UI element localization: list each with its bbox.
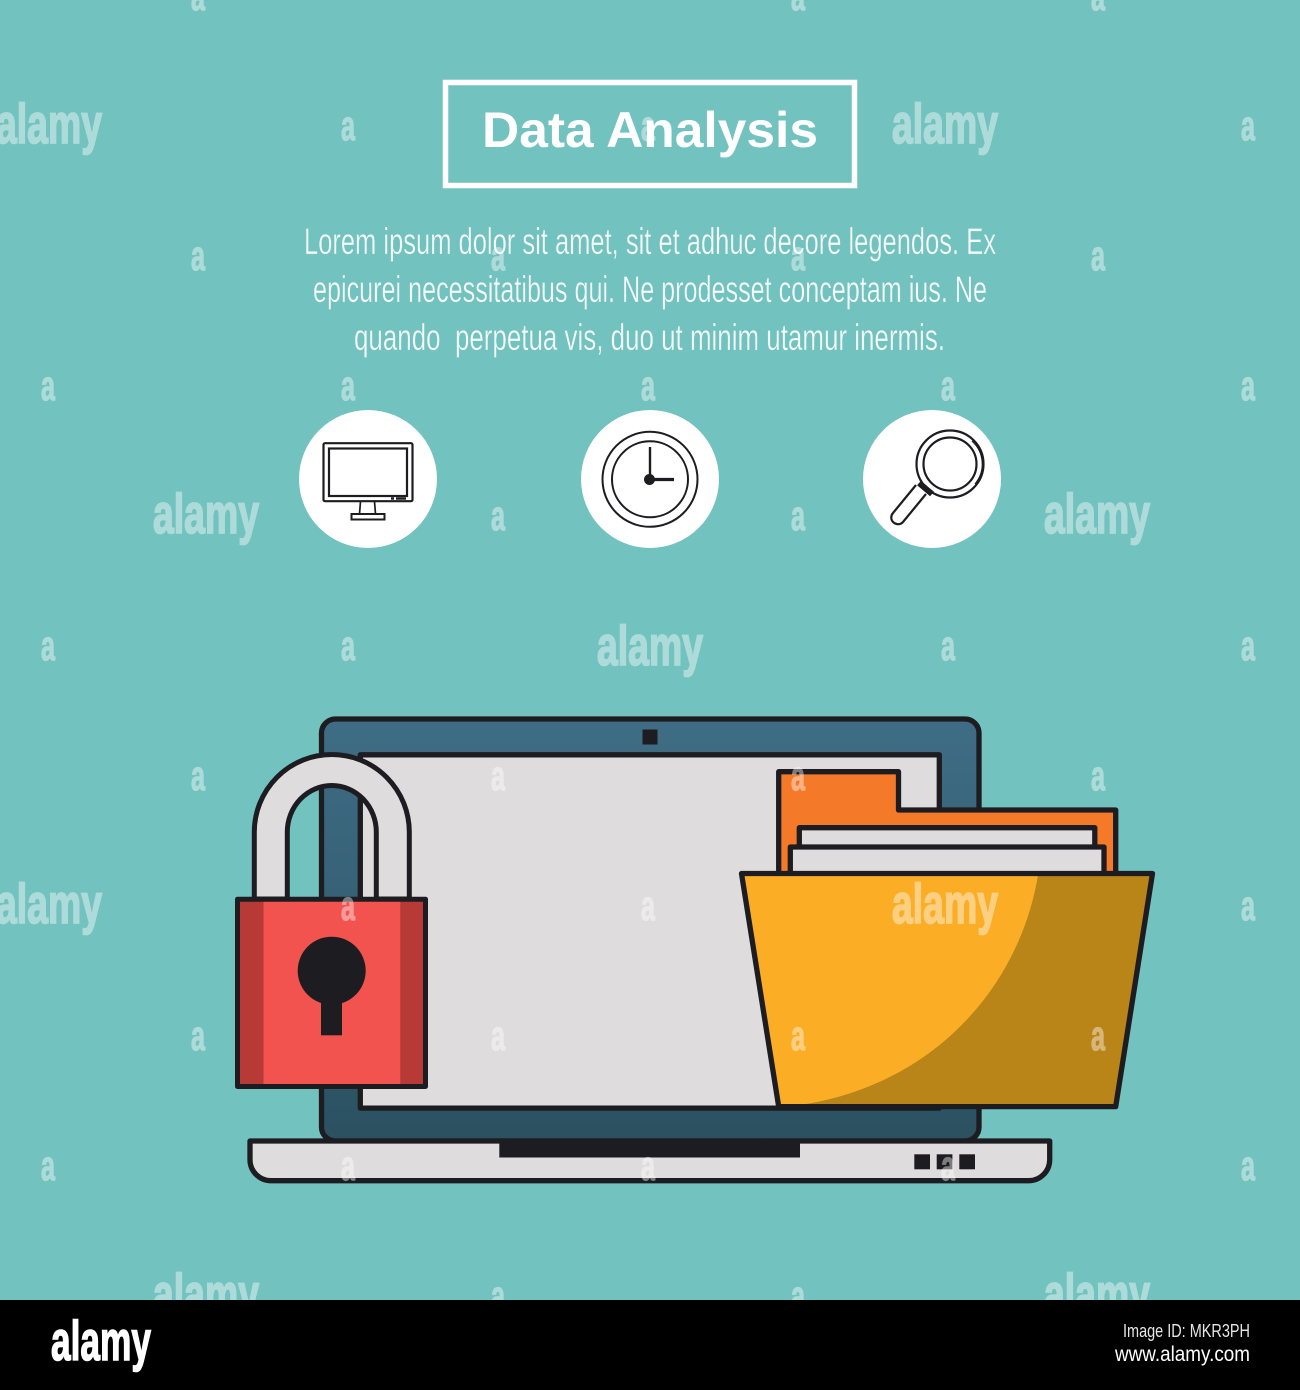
watermarks: a: [791, 1272, 805, 1319]
title box: Data Analysis: [482, 102, 818, 158]
keyhole: [298, 937, 366, 1035]
watermarks: a: [341, 622, 355, 669]
watermarks: a: [191, 232, 205, 279]
watermarks: a: [491, 752, 505, 799]
watermarks: a: [1241, 882, 1255, 929]
watermarks: a: [191, 1012, 205, 1059]
back paper: [799, 828, 1095, 876]
watermarks: a: [791, 492, 805, 539]
watermarks: a: [1241, 1142, 1255, 1189]
laptop screen: [360, 755, 939, 1108]
watermarks: a: [941, 362, 955, 409]
watermarks: a: [41, 622, 55, 669]
watermarks: a: [1241, 622, 1255, 669]
watermarks: alamy: [153, 1262, 259, 1325]
intro text block: quando perpetua vis, duo ut minim utamur inermis.: [354, 317, 945, 358]
folder back: [779, 772, 1116, 876]
website: www.alamy.com: [1114, 1343, 1250, 1366]
padlock body: [238, 899, 426, 1086]
laptop lid: [322, 719, 979, 1141]
laptop camera: [642, 730, 658, 744]
watermarks: a: [791, 1012, 805, 1059]
icon: monitor: [299, 410, 437, 548]
watermarks: a: [641, 362, 655, 409]
watermarks: a: [41, 362, 55, 409]
title box: [446, 82, 854, 186]
watermarks: a: [1091, 1012, 1105, 1059]
icon: clock: [581, 410, 719, 548]
front paper: [790, 847, 1104, 876]
intro text block: [304, 221, 996, 358]
watermarks: a: [641, 882, 655, 929]
footer logo: alamy: [51, 1309, 151, 1372]
watermarks: a: [791, 752, 805, 799]
intro text block: epicurei necessitatibus qui. Ne prodesset conceptam ius. Ne: [313, 269, 987, 310]
image id: Image ID: MKR3PH: [1123, 1321, 1250, 1341]
watermarks: alamy: [892, 872, 998, 935]
footer bar: [0, 1300, 1300, 1390]
watermarks: a: [191, 752, 205, 799]
watermarks: alamy: [1044, 482, 1150, 545]
folder front highlight: [743, 875, 1038, 1105]
watermarks: alamy: [1044, 1262, 1150, 1325]
watermarks: a: [641, 1142, 655, 1189]
watermarks: a: [41, 1142, 55, 1189]
icon: magnifying glass: [863, 410, 1001, 548]
watermarks: a: [1241, 102, 1255, 149]
watermarks: a: [1091, 752, 1105, 799]
watermarks: a: [491, 1012, 505, 1059]
folder front shadow: [742, 874, 1152, 1107]
watermarks: a: [491, 492, 505, 539]
watermarks: a: [641, 102, 655, 149]
folder front outline: [742, 874, 1152, 1107]
padlock: [238, 755, 426, 1086]
watermarks: a: [941, 622, 955, 669]
trackpad notch: [499, 1139, 800, 1158]
padlock shackle: [254, 755, 409, 899]
watermarks: a: [341, 882, 355, 929]
watermarks: a: [491, 1272, 505, 1319]
watermarks: alamy: [0, 872, 102, 935]
watermarks: a: [491, 232, 505, 279]
watermarks: a: [341, 362, 355, 409]
watermarks: alamy: [0, 92, 102, 155]
folder: [742, 772, 1152, 1107]
laptop base: [250, 1141, 1050, 1181]
watermarks: a: [341, 102, 355, 149]
watermarks: a: [1241, 362, 1255, 409]
watermarks: a: [1091, 232, 1105, 279]
watermarks: a: [941, 1142, 955, 1189]
base indicator squares: [914, 1154, 975, 1169]
watermarks: alamy: [892, 92, 998, 155]
watermarks: alamy: [597, 614, 703, 677]
intro text block: Lorem ipsum dolor sit amet, sit et adhuc decore legendos. Ex: [304, 221, 996, 262]
watermarks: a: [341, 1142, 355, 1189]
laptop: [250, 719, 1050, 1181]
watermarks: a: [791, 232, 805, 279]
watermarks: alamy: [153, 482, 259, 545]
